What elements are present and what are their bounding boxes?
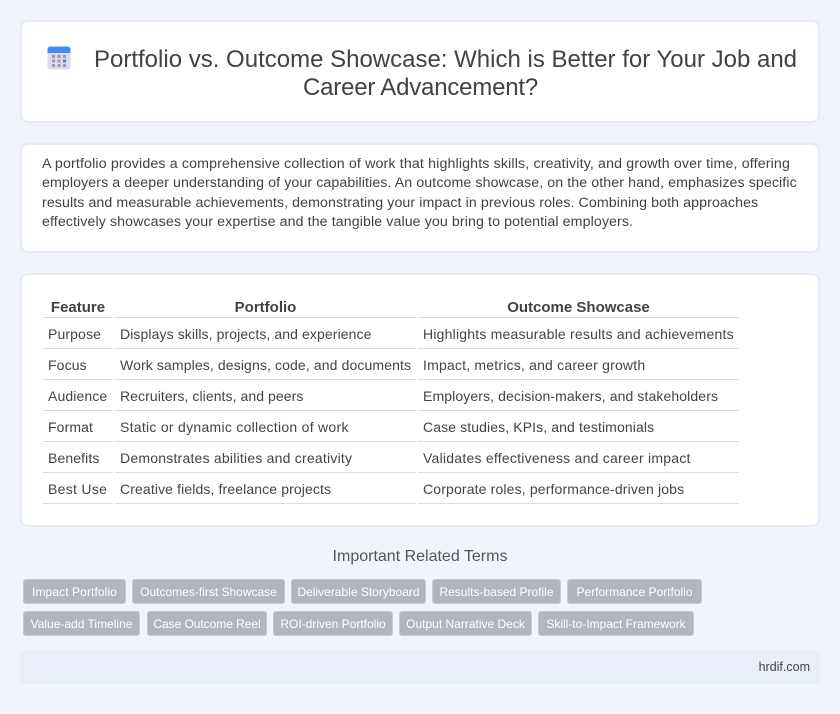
heading: related terms: Important Related Terms <box>333 548 507 565</box>
panel: intro card <box>20 143 820 253</box>
row: audience <box>48 388 718 404</box>
row: benefits <box>48 450 691 466</box>
tag group: related terms: Outcomes-first Showcase <box>140 585 277 599</box>
table header: Portfolio <box>235 299 296 316</box>
tag group: related terms <box>23 579 702 636</box>
tag group: related terms: Case Outcome Reel <box>153 617 261 631</box>
table header: Feature <box>51 299 105 316</box>
row: purpose <box>48 326 734 342</box>
row: format: Format <box>48 419 93 435</box>
row: best use: Corporate roles, performance-driven jobs <box>423 481 684 497</box>
tag group: related terms: Deliverable Storyboard <box>297 585 420 599</box>
table header <box>51 299 650 316</box>
intro paragraph: results and measurable achievements, demonstrating your impact in previous roles. Combining both approaches <box>42 195 758 211</box>
tag group: related terms: Output Narrative Deck <box>406 617 525 631</box>
panel: title card <box>20 20 820 123</box>
tag group: related terms: Results-based Profile <box>439 585 554 599</box>
footer source: hrdif.com <box>759 660 810 674</box>
title <box>94 46 797 101</box>
row: best use: Best Use <box>48 481 107 497</box>
intro paragraph: employers a deeper understanding of your capabilities. An outcome showcase, on the other hand, emphasizes specific <box>42 175 797 191</box>
row: benefits: Demonstrates abilities and creativity <box>120 450 352 466</box>
footer bar <box>20 650 820 684</box>
row: best use: Creative fields, freelance projects <box>120 481 331 497</box>
row: audience: Employers, decision-makers, and stakeholders <box>423 388 718 404</box>
row: purpose: Purpose <box>48 326 101 342</box>
row: focus: Impact, metrics, and career growth <box>423 357 645 373</box>
row: benefits: Validates effectiveness and career impact <box>423 450 691 466</box>
row: format: Case studies, KPIs, and testimonials <box>423 419 654 435</box>
row: format: Static or dynamic collection of work <box>120 419 349 435</box>
comparison table <box>43 299 739 504</box>
tag group: related terms: Skill-to-Impact Framework <box>546 617 686 631</box>
intro paragraph: effectively showcases your expertise and the tangible value you bring to potential employers. <box>42 214 633 230</box>
row: format <box>48 419 654 435</box>
row: purpose: Highlights measurable results and achievements <box>423 326 734 342</box>
row: audience: Audience <box>48 388 107 404</box>
intro paragraph: A portfolio provides a comprehensive collection of work that highlights skills, creativity, and growth over time, offering <box>42 156 790 172</box>
row: purpose: Displays skills, projects, and experience <box>120 326 372 342</box>
row: benefits: Benefits <box>48 450 100 466</box>
row: focus: Work samples, designs, code, and documents <box>120 357 411 373</box>
tag group: related terms: Value-add Timeline <box>31 617 132 631</box>
tag group: related terms: Performance Portfolio <box>576 585 693 599</box>
panel: comparison table card <box>20 273 820 527</box>
row: focus: Focus <box>48 357 87 373</box>
tag group: related terms: ROI-driven Portfolio <box>280 617 386 631</box>
intro paragraph <box>42 156 797 230</box>
tag group: related terms: Impact Portfolio <box>32 585 117 599</box>
row: focus <box>48 357 645 373</box>
title: Career Advancement? <box>303 74 538 101</box>
table header: Outcome Showcase <box>507 299 650 316</box>
title: Portfolio vs. Outcome Showcase: Which is Better for Your Job and <box>94 46 797 73</box>
row: audience: Recruiters, clients, and peers <box>120 388 303 404</box>
row: best use <box>48 481 684 497</box>
icon: calendar <box>48 46 70 70</box>
